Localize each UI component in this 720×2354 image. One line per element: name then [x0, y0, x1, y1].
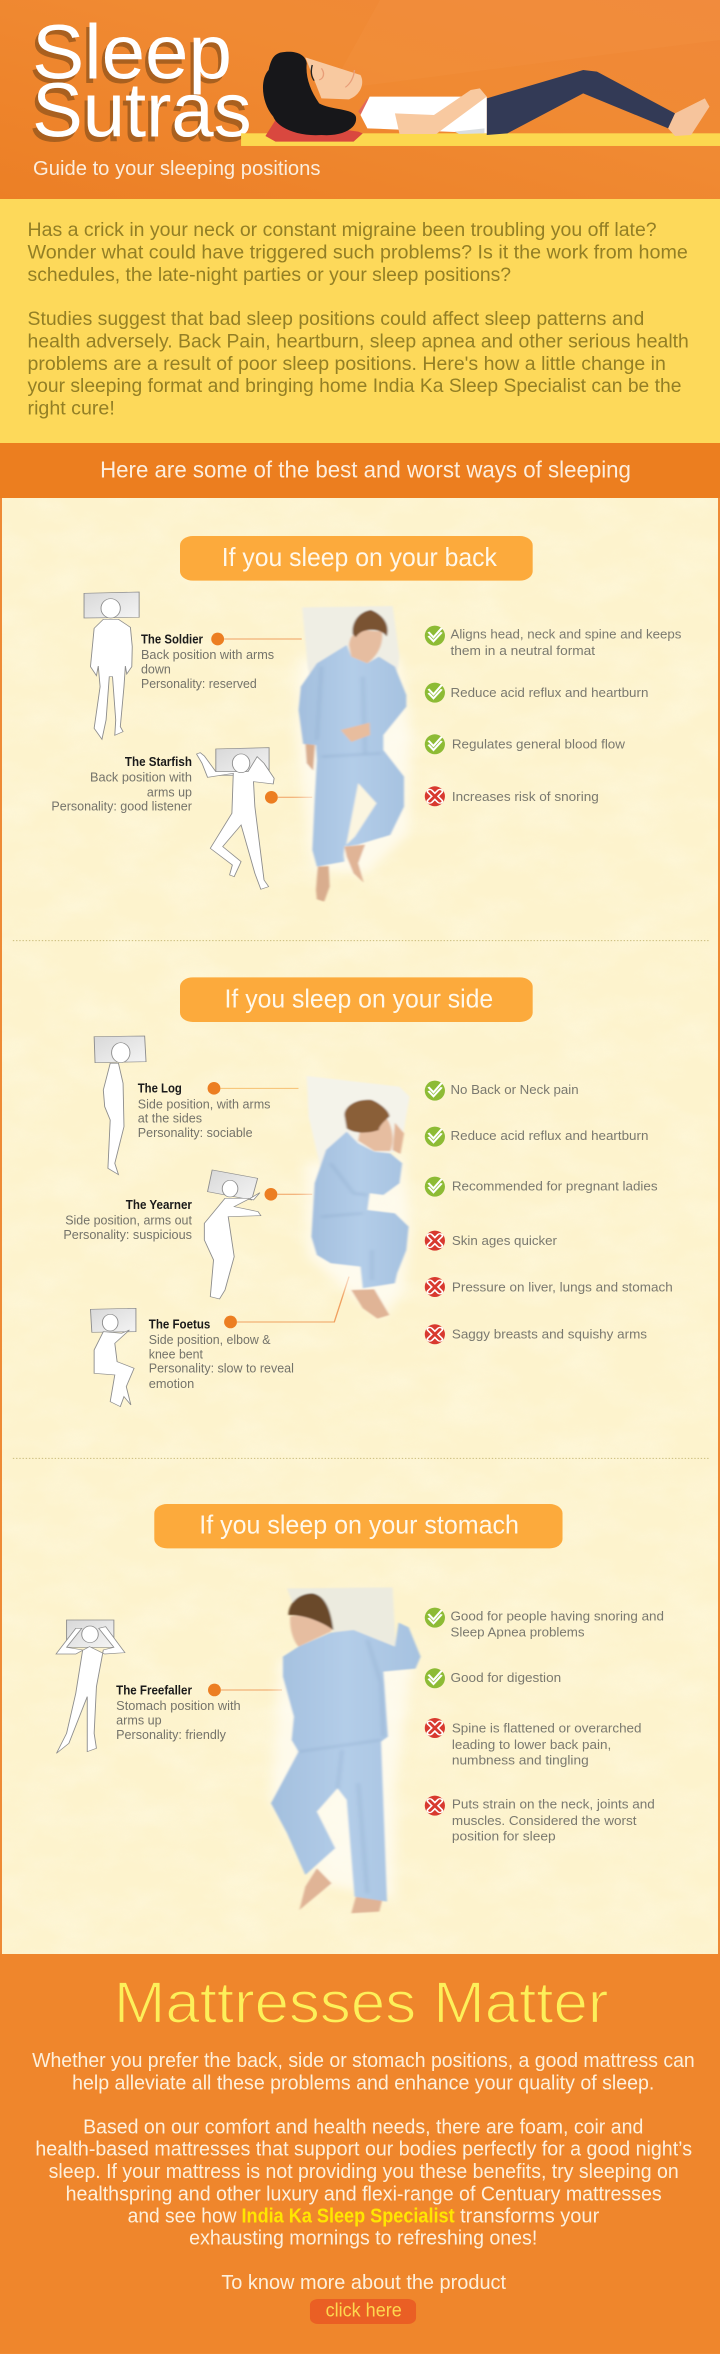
label: yearner: [63, 1197, 192, 1242]
button: click here: click here: [326, 2299, 402, 2320]
pointer: foetus: [224, 1277, 349, 1328]
figure: log: [94, 1036, 146, 1175]
heading: back: [180, 536, 533, 581]
subtitle: Guide to your sleeping positions: [33, 157, 321, 180]
photo: person on stomach: [271, 1587, 421, 1913]
label: starfish: [51, 754, 192, 814]
label: freefaller: The Freefaller: [116, 1683, 192, 1698]
label: foetus: The Foetus: [149, 1317, 210, 1332]
body text: and see how: [128, 2205, 237, 2227]
figure: yearner: [204, 1170, 261, 1299]
label: soldier: [141, 632, 274, 691]
list: stomach pros and cons: muscles. Considered the worst: [452, 1813, 637, 1828]
panel: header: [0, 0, 720, 199]
body text: India Ka Sleep Specialist: [242, 2205, 455, 2227]
label: yearner: The Yearner: [126, 1197, 192, 1212]
section: back: [13, 536, 709, 941]
list: side pros and cons: Saggy breasts and squishy arms: [452, 1327, 647, 1342]
list: back pros and cons: [425, 626, 681, 806]
title: Sutras: [32, 67, 252, 153]
list: back pros and cons: them in a neutral format: [450, 643, 596, 658]
list: back pros and cons: Increases risk of snoring: [452, 789, 599, 804]
list: stomach pros and cons: position for sleep: [452, 1829, 556, 1844]
list: stomach pros and cons: leading to lower back pain,: [452, 1737, 611, 1752]
label: log: at the sides: [138, 1111, 202, 1126]
body text: exhausting mornings to refreshing ones!: [189, 2227, 537, 2250]
heading: side: If you sleep on your side: [225, 984, 493, 1013]
pointer: yearner: [264, 1188, 312, 1201]
photo: person on side: [305, 1076, 411, 1319]
label: starfish: Personality: good listener: [51, 799, 192, 814]
list: stomach pros and cons: Spine is flattened or overarched: [452, 1721, 642, 1736]
list: side pros and cons: [425, 1081, 673, 1344]
illustration: sleeping person: [241, 52, 720, 146]
list: stomach pros and cons: Sleep Apnea problems: [450, 1625, 585, 1640]
pointer: soldier: [211, 633, 302, 645]
heading: back: If you sleep on your back: [222, 543, 497, 572]
label: foetus: Personality: slow to reveal: [149, 1361, 294, 1376]
figure: soldier: [84, 592, 139, 739]
title: Sleep: [32, 9, 232, 95]
pointer: freefaller: [208, 1684, 282, 1696]
photo: person on back: [296, 606, 411, 902]
label: log: The Log: [138, 1081, 182, 1096]
list: stomach pros and cons: [425, 1608, 664, 1844]
heading: side: [180, 977, 533, 1022]
title: [29, 9, 252, 158]
heading: stomach: [154, 1504, 563, 1548]
label: yearner: Personality: suspicious: [63, 1227, 192, 1242]
pointer: starfish: [265, 791, 312, 804]
label: soldier: The Soldier: [141, 632, 203, 647]
label: freefaller: Personality: friendly: [116, 1727, 226, 1742]
title: Sleep: [29, 13, 229, 100]
label: starfish: The Starfish: [125, 754, 192, 769]
label: freefaller: [116, 1683, 241, 1742]
panel: intro text: [0, 199, 720, 443]
list: back pros and cons: Reduce acid reflux and heartburn: [450, 685, 648, 700]
list: back pros and cons: Regulates general blood flow: [452, 737, 625, 752]
label: soldier: Back position with arms: [141, 647, 274, 662]
list: stomach pros and cons: Puts strain on the neck, joints and: [452, 1797, 655, 1812]
label: soldier: down: [141, 662, 171, 677]
label: yearner: Side position, arms out: [65, 1213, 192, 1228]
label: foetus: [149, 1317, 294, 1391]
figure: freefaller: [56, 1620, 125, 1753]
label: foetus: knee bent: [149, 1347, 203, 1362]
intro paragraphs: [28, 219, 689, 418]
heading: stomach: If you sleep on your stomach: [199, 1510, 519, 1539]
label: starfish: arms up: [147, 785, 192, 800]
body text: To know more about the product: [221, 2272, 506, 2294]
label: freefaller: Stomach position with: [116, 1698, 241, 1713]
label: freefaller: arms up: [116, 1713, 162, 1728]
body text: transforms your: [460, 2205, 599, 2227]
band: best and worst: [0, 443, 720, 498]
list: side pros and cons: No Back or Neck pain: [450, 1082, 579, 1097]
label: log: Personality: sociable: [138, 1125, 253, 1140]
section: side: [63, 977, 673, 1407]
intro paragraphs: right cure!: [28, 397, 115, 418]
label: log: Side position, with arms: [138, 1097, 270, 1112]
figure: starfish: [197, 748, 274, 889]
pointer: log: [208, 1082, 298, 1095]
list: side pros and cons: Skin ages quicker: [452, 1233, 558, 1248]
panel: mattresses matter: [0, 1954, 720, 2354]
list: stomach pros and cons: Good for digestion: [450, 1670, 561, 1685]
intro paragraphs: schedules, the late-night parties or your sleep positions?: [28, 264, 511, 285]
list: side pros and cons: Reduce acid reflux and heartburn: [450, 1128, 648, 1143]
title: Sutras: [29, 72, 248, 158]
label: foetus: Side position, elbow &: [149, 1332, 271, 1347]
list: stomach pros and cons: numbness and tingling: [452, 1753, 589, 1768]
label: starfish: Back position with: [90, 770, 192, 785]
button: click here: [310, 2299, 416, 2324]
label: foetus: emotion: [149, 1376, 194, 1391]
body text: [32, 2050, 695, 2294]
label: log: [138, 1081, 270, 1140]
section: stomach: [13, 1458, 709, 1913]
label: soldier: Personality: reserved: [141, 676, 257, 691]
figure: foetus: [90, 1308, 136, 1407]
